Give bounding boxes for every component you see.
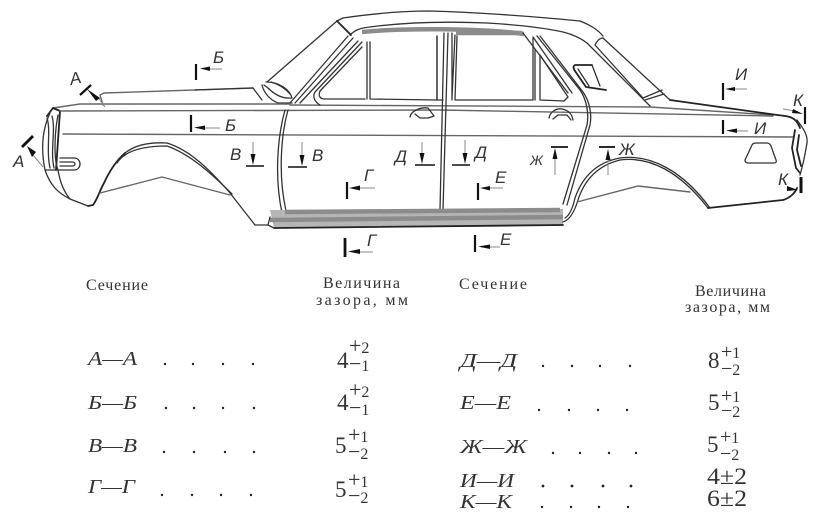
- belt lines and body crease: [60, 100, 800, 137]
- mark: Е upper: Е: [495, 168, 507, 187]
- mark: В right: В: [312, 146, 323, 165]
- mark: Д left: Д: [393, 147, 407, 166]
- section marks on the car: [12, 48, 805, 257]
- row: А—А: 4: [337, 348, 349, 373]
- mark: А left: [12, 136, 43, 171]
- row: Г—Г: +1: [348, 467, 368, 492]
- row: Ж—Ж: +1: [720, 426, 739, 448]
- row: Д—Д: −2: [721, 358, 740, 380]
- mark: Ж left: [529, 147, 568, 175]
- row: Е—Е: Е—Е: [459, 392, 511, 414]
- mark: И lower: [723, 119, 767, 138]
- mark: Д right: [452, 140, 487, 165]
- mark: В left: В: [230, 145, 241, 164]
- window frames and pillars: [314, 33, 572, 210]
- mark: Д left: [393, 142, 435, 166]
- row: Б—Б: +2: [349, 377, 369, 402]
- row: К—К: 6±2: [707, 486, 747, 511]
- row: В—В: [88, 422, 368, 464]
- row: Е—Е: +1: [721, 385, 740, 407]
- rear end and trunk lid: [792, 120, 807, 175]
- row: Г—Г: −2: [348, 483, 368, 508]
- heading: Величина зазора: Величина: [695, 283, 766, 300]
- row: Е—Е: 5: [708, 390, 720, 415]
- row: Г—Г: 5: [335, 477, 346, 502]
- row: В—В: +1: [348, 422, 368, 447]
- heading: Величина зазора: [316, 275, 408, 309]
- mark: К lower: К: [778, 170, 789, 189]
- row: К—К: К—К: [459, 491, 514, 513]
- heading: Сечение: Сечение: [86, 277, 148, 294]
- heading: Сечение: Сечение: [459, 276, 527, 293]
- row: В—В: −2: [348, 439, 368, 464]
- mark: Б lower: Б: [225, 116, 236, 135]
- mark: Е lower: Е: [500, 230, 512, 249]
- mark: В left: [230, 142, 264, 166]
- door gaps: [278, 36, 591, 213]
- heading: Величина зазора: Величина: [323, 275, 400, 292]
- mark: Г lower: [345, 231, 378, 257]
- mark: Ж left: Ж: [529, 152, 544, 168]
- row: А—А: −1: [349, 351, 369, 376]
- mark: К upper: К: [793, 91, 804, 110]
- row: Д—Д: 8: [708, 348, 720, 373]
- mark: Д right: Д: [473, 143, 487, 162]
- row: А—А: +2: [349, 333, 369, 358]
- row: Д—Д: [457, 341, 740, 380]
- mark: Г upper: [347, 166, 375, 199]
- rear wheel arch: [563, 157, 797, 222]
- car body side view drawing: [43, 11, 807, 228]
- row: Ж—Ж: 5: [707, 432, 718, 457]
- mark: Г lower: Г: [367, 231, 378, 250]
- rear quarter vent: [574, 65, 606, 90]
- front wheel arch: [88, 143, 255, 225]
- mark: Е lower: [475, 230, 512, 252]
- heading: Величина зазора: зазора, мм: [685, 299, 770, 316]
- row: Б—Б: 4: [337, 390, 349, 415]
- row: Ж—Ж: Ж—Ж: [459, 436, 529, 458]
- row: Ж—Ж: [459, 426, 739, 465]
- mark: Г upper: Г: [364, 166, 375, 185]
- heading: Величина зазора: [685, 283, 770, 316]
- row: И—И: [459, 464, 747, 492]
- mark: А top: А: [67, 68, 83, 89]
- row: Д—Д: Д—Д: [457, 350, 519, 372]
- row: К—К: [459, 486, 747, 513]
- roof and windshield: [262, 11, 670, 106]
- mark: Ж right: [599, 140, 636, 175]
- tail light: [745, 143, 776, 163]
- row: Б—Б: Б—Б: [87, 392, 137, 414]
- mark: А left: А: [12, 152, 24, 171]
- row: Г—Г: Г—Г: [87, 476, 137, 498]
- row: Е—Е: [459, 385, 740, 422]
- hood and nose: [43, 88, 290, 206]
- mark: И lower: И: [754, 119, 767, 138]
- mark: А top: [67, 68, 105, 107]
- row: Г—Г: [87, 467, 368, 508]
- mark: И upper: И: [735, 65, 748, 84]
- mark: Е upper: [478, 168, 507, 200]
- mark: Ж right: Ж: [618, 140, 636, 159]
- row: Д—Д: +1: [721, 341, 740, 363]
- row: Б—Б: [87, 377, 369, 420]
- mark: Б top: [196, 48, 224, 80]
- row: В—В: В—В: [88, 435, 137, 457]
- row: А—А: [86, 333, 369, 376]
- sill panels: [255, 209, 563, 228]
- row: А—А: А—А: [86, 348, 138, 370]
- mark: К lower: [778, 170, 801, 193]
- mark: Б lower: [191, 115, 236, 135]
- mark: К upper: [783, 91, 805, 124]
- row: Ж—Ж: −2: [720, 443, 739, 465]
- row: И—И: И—И: [459, 470, 516, 492]
- table: right column: [457, 276, 770, 513]
- row: И—И: 4±2: [707, 464, 747, 489]
- row: В—В: 5: [335, 433, 346, 458]
- door handles: [410, 108, 573, 120]
- mark: Б top: Б: [213, 48, 224, 67]
- table: left column: [86, 275, 408, 508]
- heading: Величина зазора: зазора, мм: [316, 292, 408, 309]
- mark: И upper: [723, 65, 748, 100]
- mark: В right: [288, 142, 323, 167]
- row: Е—Е: −2: [721, 400, 740, 422]
- row: Б—Б: −1: [349, 395, 369, 420]
